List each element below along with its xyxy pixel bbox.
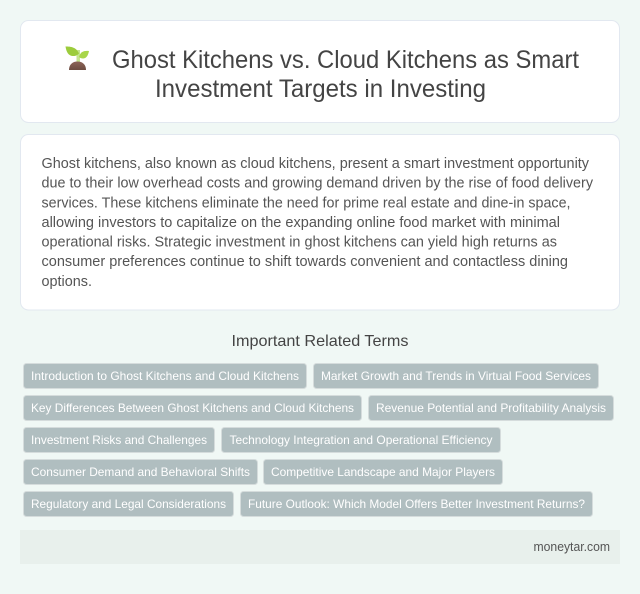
title xyxy=(112,46,579,103)
text block: description xyxy=(42,156,594,290)
tag xyxy=(24,492,234,516)
text: source: moneytar.com xyxy=(534,540,610,554)
panel: description xyxy=(20,134,620,310)
tag: Consumer Demand and Behavioral Shifts xyxy=(31,465,250,479)
text block: description: allowing investors to capitalize on the expanding online food market with minimal xyxy=(42,215,560,231)
tag: Investment Risks and Challenges xyxy=(31,433,207,447)
tag xyxy=(24,364,306,388)
tag: Regulatory and Legal Considerations xyxy=(31,497,226,511)
text block: description: options. xyxy=(42,274,92,290)
text block: description: due to their low overhead costs and growing demand driven by the rise of food delivery xyxy=(42,176,594,192)
title: Ghost Kitchens vs. Cloud Kitchens as Smart xyxy=(112,46,579,74)
panel: term tags xyxy=(24,364,614,516)
panel: title card xyxy=(20,20,620,122)
tag xyxy=(222,428,500,452)
tag: Technology Integration and Operational Efficiency xyxy=(230,433,492,447)
icon: seedling xyxy=(66,46,89,70)
tag: Competitive Landscape and Major Players xyxy=(271,465,495,479)
tag xyxy=(24,396,362,420)
text block: description: consumer preferences continue to shift towards convenient and contactless dining xyxy=(42,254,568,270)
heading: important related terms: Important Related Terms xyxy=(232,333,408,350)
tag xyxy=(24,428,214,452)
title: Investment Targets in Investing xyxy=(155,75,486,103)
tag: Future Outlook: Which Model Offers Better Investment Returns? xyxy=(248,497,585,511)
panel: footer xyxy=(20,530,620,564)
tag xyxy=(264,460,502,484)
tag xyxy=(24,460,258,484)
tag: Introduction to Ghost Kitchens and Cloud Kitchens xyxy=(31,369,299,383)
tag: Market Growth and Trends in Virtual Food Services xyxy=(321,369,591,383)
text block: description: services. These kitchens eliminate the need for prime real estate and dine-in space, xyxy=(42,195,570,211)
tag: Revenue Potential and Profitability Analysis xyxy=(376,401,606,415)
text block: description: operational risks. Strategic investment in ghost kitchens can yield high returns as xyxy=(42,235,557,251)
text block: description: Ghost kitchens, also known as cloud kitchens, present a smart investment opportunity xyxy=(42,156,590,172)
tag: Key Differences Between Ghost Kitchens and Cloud Kitchens xyxy=(31,401,354,415)
tag xyxy=(314,364,598,388)
tag xyxy=(240,492,592,516)
tag xyxy=(368,396,614,420)
